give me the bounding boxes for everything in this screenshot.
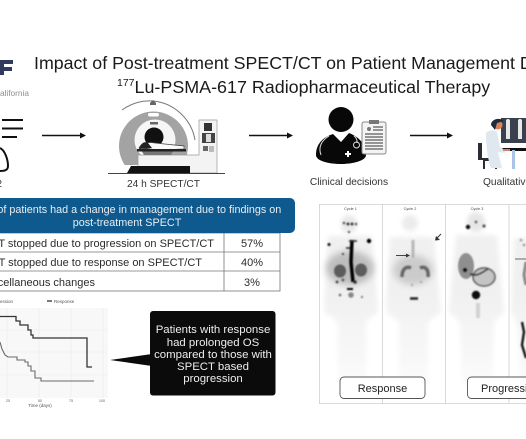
table rows [0, 233, 280, 291]
arrow: cycle 2 lesion [396, 254, 410, 258]
scan: cycle 1 [324, 207, 378, 385]
banner: change in management: post-treatment SPECT [73, 217, 182, 229]
icon: clinician with clipboard [316, 107, 386, 164]
title [34, 53, 526, 97]
arrow: to SPECT/CT [42, 132, 86, 138]
callout: prolonged OS: compared to those with [154, 349, 272, 361]
arrow: to qualitative assessment [410, 132, 453, 138]
callout: prolonged OS: Patients with response [156, 324, 270, 336]
scan: cycle 1: Cycle 1 [344, 207, 357, 211]
panel: post-treatment SPECT images [319, 204, 526, 404]
label: Response [340, 377, 425, 398]
label: 24 h SPECT/CT: 24 h SPECT/CT [127, 179, 200, 190]
chart: Kaplan-Meier overall survival: ession [0, 299, 14, 304]
title: Lu-PSMA-617 Radiopharmaceutical Therapy [135, 77, 490, 97]
chart: Kaplan-Meier overall survival: 100 [99, 399, 105, 403]
chart: Kaplan-Meier overall survival: 50 [38, 399, 42, 403]
logo: UCSF: alifornia [0, 88, 29, 98]
arrow: cycle 2 shoulder [435, 234, 441, 240]
curve: progression [0, 342, 94, 381]
banner: change in management [0, 198, 295, 233]
icon: physician at monitor [478, 118, 526, 169]
chart: Kaplan-Meier overall survival: 25 [6, 399, 10, 403]
table rows: 40% [241, 257, 263, 269]
arrow: to clinical decisions [249, 132, 293, 138]
scan: cycle 3 [449, 207, 504, 385]
table rows: 3% [244, 277, 260, 289]
chart: Kaplan-Meier overall survival: 75 [69, 399, 73, 403]
icon: treatment step [0, 120, 23, 190]
callout: prolonged OS: progression [183, 373, 243, 385]
table rows: 57% [241, 238, 263, 250]
curve: response [0, 316, 92, 367]
title: 177 [117, 77, 135, 89]
logo: UCSF [0, 60, 29, 98]
callout: prolonged OS: had prolonged OS [167, 337, 260, 349]
callout: prolonged OS: SPECT based [177, 361, 249, 373]
scan: cycle 2: Cycle 2 [404, 207, 416, 211]
chart: Kaplan-Meier overall survival [0, 299, 108, 408]
panel dividers [319, 204, 526, 404]
table: management changes [0, 198, 295, 291]
scan: cycle 3: Cycle 3 [471, 207, 483, 211]
label: Clinical decisions: Clinical decisions [310, 177, 388, 188]
label: Progression [468, 377, 526, 398]
chart: Kaplan-Meier overall survival: Time (days) [28, 403, 52, 408]
chart: Kaplan-Meier overall survival: Response [54, 299, 75, 304]
label: Response: Response [358, 383, 407, 395]
scan: cycle 4 [511, 238, 526, 385]
icon: SPECT/CT scanner [108, 100, 225, 174]
callout: prolonged OS [110, 311, 276, 396]
scan: cycle 2 [386, 207, 441, 385]
